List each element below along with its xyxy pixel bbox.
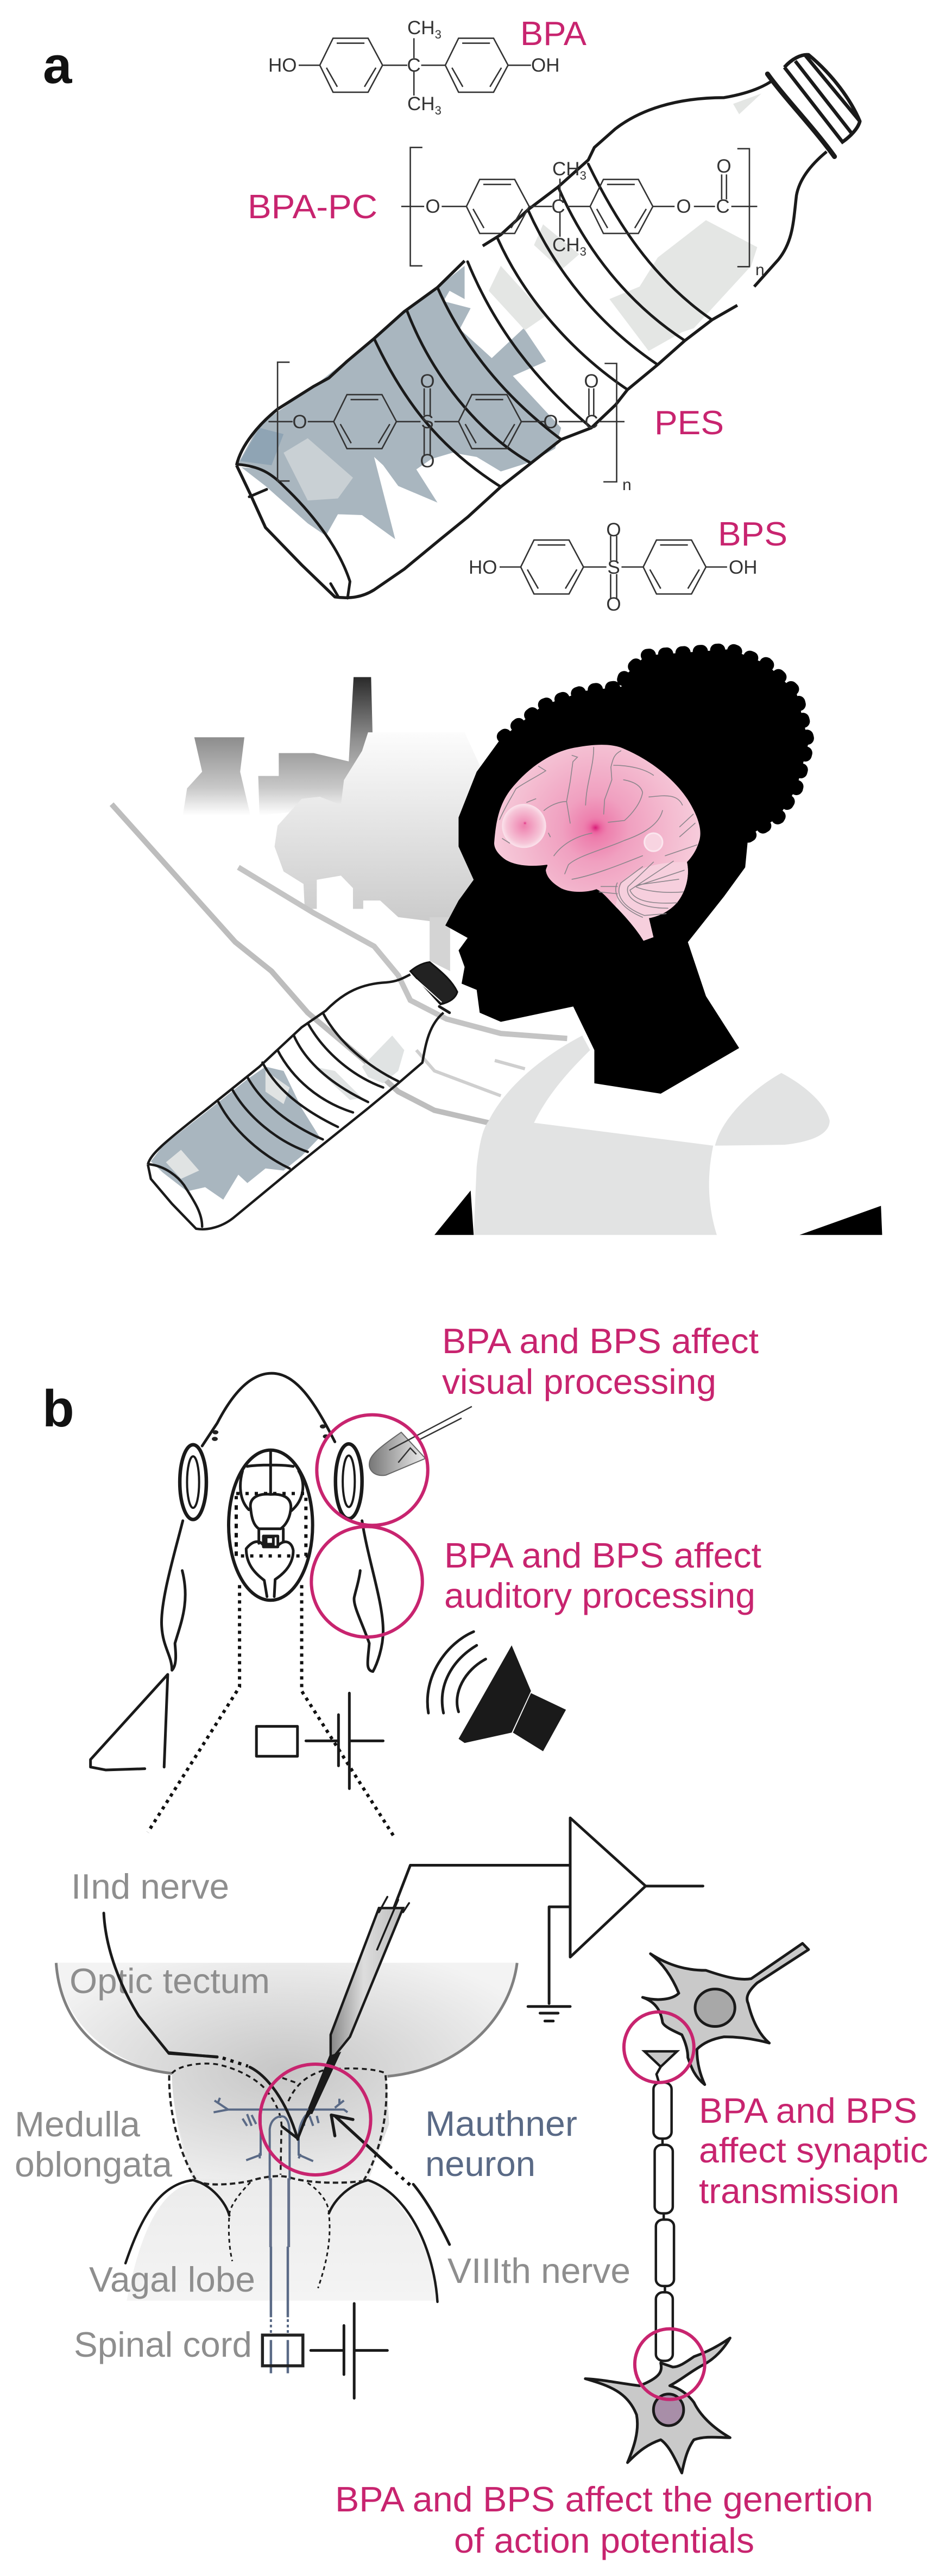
BPA-PC molecule: 3 — [580, 245, 586, 258]
BPA-PC molecule: O — [676, 196, 691, 217]
BPA-PC molecule — [248, 148, 765, 279]
axon with myelin segments — [653, 2067, 674, 2361]
Mauthner neuron label: neuron — [425, 2144, 535, 2184]
medulla and Mauthner neuron detail — [168, 2052, 413, 2247]
brain diagram labels: Medulla — [15, 2104, 141, 2144]
callout: synaptic transmission: affect synaptic — [699, 2130, 928, 2170]
icon: LED light — [369, 1406, 472, 1475]
BPA molecule: C — [407, 55, 421, 76]
factory and smoke background — [112, 677, 567, 1123]
VIIIth nerve arrow — [331, 2115, 391, 2167]
BPA-PC label: BPA-PC — [248, 188, 377, 226]
callout: auditory processing — [444, 1536, 761, 1615]
BPA molecule — [268, 15, 587, 117]
tadpole brain — [229, 1450, 313, 1600]
BPA molecule: 3 — [435, 104, 442, 117]
IInd nerve label: IInd nerve — [71, 1867, 229, 1906]
BPA-PC molecule: O — [425, 196, 440, 217]
PES molecule: O — [420, 371, 435, 392]
callout: visual processing — [442, 1321, 759, 1401]
BPS molecule: S — [607, 557, 620, 578]
stimulating electrode: tadpole — [256, 1693, 383, 1788]
optic tectum label: Optic tectum — [70, 1961, 270, 2001]
callout: action potentials — [335, 2479, 873, 2560]
optic tectum outline — [56, 1963, 517, 2076]
Vagal lobe label: Vagal lobe — [89, 2260, 255, 2299]
Mauthner neuron — [213, 2098, 348, 2180]
BPS molecule: HO — [469, 557, 497, 578]
Spinal cord label: Spinal cord — [74, 2325, 252, 2364]
recording pipette — [305, 1897, 409, 2120]
IInd nerve ending arrow — [250, 2067, 308, 2140]
panel b label: b — [42, 1380, 74, 1438]
BPA-PC molecule: C — [551, 196, 565, 217]
BPA-PC molecule: n — [755, 261, 765, 279]
brain — [494, 745, 701, 941]
callout: synaptic transmission: transmission — [699, 2171, 899, 2211]
amplifier and recording wire — [392, 1818, 703, 2021]
callout: auditory processing: BPA and BPS affect — [444, 1536, 761, 1575]
tadpole eyes — [180, 1444, 362, 1519]
callout: action potentials: of action potentials — [454, 2521, 754, 2560]
large bottle — [237, 55, 860, 598]
BPA-PC molecule: CH — [552, 158, 580, 180]
PES molecule: O — [584, 371, 599, 392]
BPS molecule: OH — [729, 557, 757, 578]
brain diagram shading — [56, 1963, 517, 2302]
PES molecule: C — [584, 411, 598, 433]
BPA label: BPA — [520, 15, 587, 53]
PES molecule: O — [543, 411, 558, 433]
brain highlight: frontal — [502, 804, 546, 848]
BPA molecule: OH — [531, 55, 559, 76]
axons into spinal cord with stimulating electrode — [262, 2247, 387, 2398]
VIIIth nerve — [413, 2184, 450, 2244]
neuron: presynaptic — [642, 1943, 809, 2085]
BPA-PC molecule: 3 — [580, 169, 586, 182]
BPA molecule: HO — [268, 55, 297, 76]
head silhouette — [445, 649, 809, 1094]
brain diagram labels — [15, 2104, 173, 2184]
callout circle: Mauthner — [260, 2064, 371, 2175]
icon: speaker — [427, 1632, 566, 1752]
callout: visual processing: visual processing — [442, 1362, 716, 1401]
dotted zoom lines — [148, 1585, 395, 1838]
BPS molecule: O — [606, 594, 621, 615]
shirt — [434, 1036, 882, 1235]
PES molecule: O — [420, 451, 435, 472]
pipette tip — [307, 2052, 341, 2114]
BPA molecule: 3 — [435, 28, 442, 41]
callout: synaptic transmission: BPA and BPS — [699, 2091, 917, 2130]
brain sulci — [500, 747, 697, 917]
tadpole body outline — [91, 1373, 383, 1770]
Mauthner neuron label — [425, 2104, 577, 2184]
PES molecule: n — [622, 476, 632, 494]
IInd nerve path — [104, 1913, 217, 2057]
BPA-PC molecule: CH — [552, 234, 580, 256]
BPS molecule — [469, 516, 787, 615]
callout circles: visual and auditory — [311, 1415, 428, 1637]
BPA-PC molecule: C — [716, 196, 730, 217]
brain diagram labels: oblongata — [15, 2144, 173, 2184]
BPS molecule: O — [606, 519, 621, 541]
PES molecule: O — [292, 411, 307, 433]
callout: action potentials: BPA and BPS affect the genertion — [335, 2479, 873, 2519]
callout: synaptic transmission — [699, 2091, 928, 2211]
vagal lobe outlines — [125, 2180, 438, 2302]
Mauthner neuron label: Mauthner — [425, 2104, 577, 2143]
brain highlight: posterior — [645, 833, 663, 851]
PES label: PES — [654, 404, 724, 442]
callout: visual processing: BPA and BPS affect — [442, 1321, 759, 1361]
panel a label: a — [43, 36, 72, 94]
BPA-PC molecule: O — [716, 156, 731, 177]
callout: auditory processing: auditory processing — [444, 1576, 755, 1615]
small bottle — [148, 962, 457, 1229]
BPS label: BPS — [718, 516, 787, 553]
VIIIth nerve label: VIIIth nerve — [447, 2251, 630, 2291]
PES molecule — [268, 362, 724, 494]
callout circles on neuron — [624, 2012, 705, 2400]
BPA molecule: CH — [407, 93, 435, 115]
neuron: postsynaptic — [585, 2338, 730, 2473]
PES molecule: S — [421, 411, 434, 433]
brain highlight: central — [581, 815, 610, 840]
BPA molecule: CH — [407, 17, 435, 39]
